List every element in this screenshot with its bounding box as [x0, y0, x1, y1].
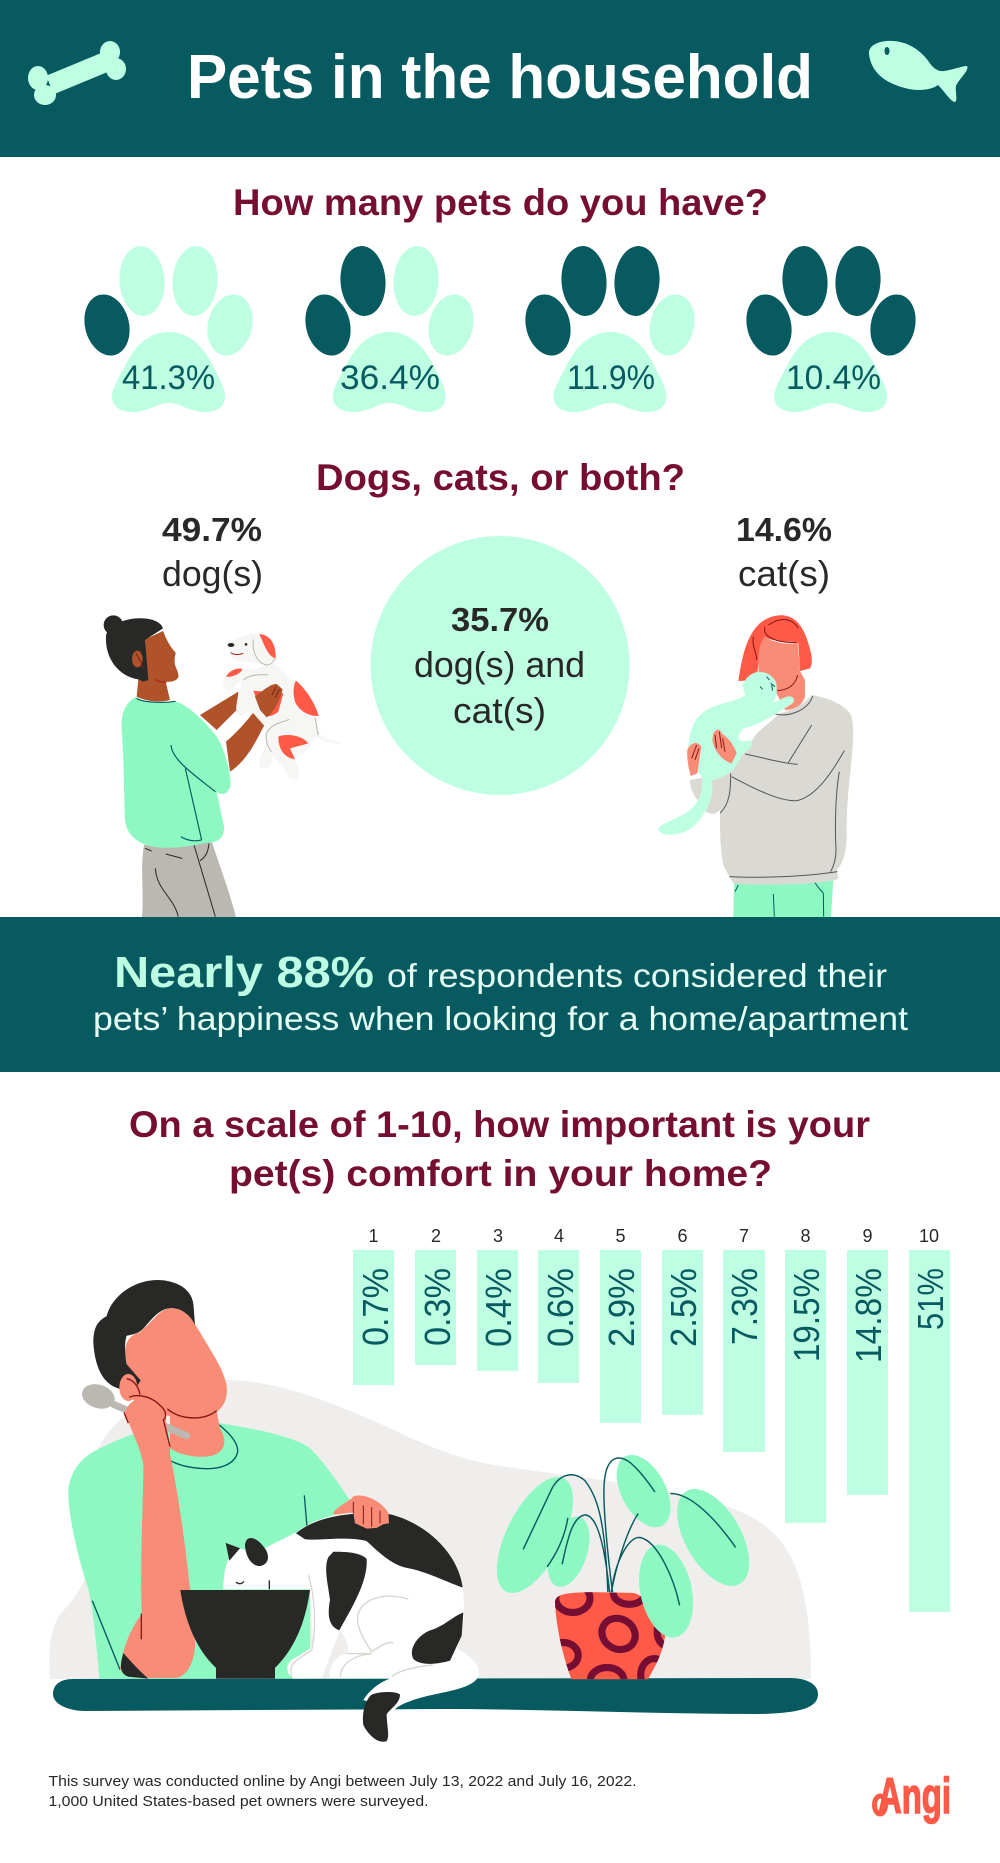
bar 5: 2.9%: 2.9% — [601, 1268, 642, 1347]
illustration: table — [53, 1678, 818, 1714]
bar 1: 0.7% — [353, 1226, 396, 1385]
bar 9: 14.8%: 9 — [862, 1226, 873, 1246]
bar 6: 2.5% — [662, 1226, 704, 1415]
bar 3: 0.4%: 3 — [493, 1226, 503, 1246]
icon: paw one pet 41.3% — [78, 245, 259, 412]
bar 1: 0.7%: 1 — [368, 1226, 379, 1246]
bar 10: 51%: 51% — [910, 1268, 951, 1330]
heading: dogs cats or both: Dogs, cats, or both? — [316, 457, 685, 498]
callout band: nearly 88%: pets’ happiness when looking for a home/apartment — [93, 1000, 908, 1037]
bar 10: 51% — [909, 1226, 951, 1612]
icon: paw two pets 36.4%: 36.4% — [340, 359, 440, 397]
bar 4: 0.6%: 4 — [554, 1226, 564, 1246]
callout band: nearly 88%: of respondents considered their — [387, 957, 887, 994]
stat: dogs 49.7% — [162, 511, 263, 594]
callout band: nearly 88% — [0, 917, 1000, 1072]
bar 2: 0.3%: 2 — [431, 1226, 441, 1246]
icon: bone — [28, 41, 126, 105]
bar 8: 19.5% — [785, 1226, 827, 1523]
stat: cats 14.6% — [736, 511, 832, 594]
footer: survey note: This survey was conducted online by Angi between July 13, 2022 and July 16, 2022. — [48, 1773, 636, 1790]
stat: cats 14.6%: 14.6% — [736, 511, 832, 548]
heading: importance of comfort: pet(s) comfort in your home? — [229, 1153, 772, 1194]
title: Pets in the household — [187, 43, 813, 112]
footer: survey note: 1,000 United States-based pet owners were surveyed. — [48, 1793, 428, 1810]
bar 3: 0.4%: 0.4% — [478, 1268, 519, 1347]
bar 4: 0.6%: 0.6% — [540, 1268, 581, 1347]
panel: header banner — [0, 0, 1000, 157]
icon: paw three pets 11.9% — [519, 245, 701, 412]
icon: paw two pets 36.4% — [299, 245, 480, 412]
icon: paw four or more pets 10.4% — [740, 245, 922, 412]
bar 7: 7.3% — [723, 1226, 765, 1452]
stat: both 35.7% in circle: 35.7% — [451, 601, 549, 638]
icon: fish — [869, 41, 967, 102]
stat: dogs 49.7%: dog(s) — [162, 553, 263, 594]
stat: both 35.7% in circle: dog(s) and — [414, 644, 585, 685]
illustration: man with cat and bowl — [68, 1280, 479, 1742]
bar 6: 2.5%: 6 — [677, 1226, 688, 1246]
bar 9: 14.8% — [847, 1226, 889, 1495]
stat: both 35.7% in circle: cat(s) — [453, 690, 546, 731]
icon: paw three pets 11.9%: 11.9% — [567, 359, 655, 397]
heading: importance of comfort: On a scale of 1-10, how important is your — [129, 1104, 870, 1145]
stat: both 35.7% in circle — [370, 536, 630, 795]
bar 4: 0.6% — [538, 1226, 581, 1383]
bar 6: 2.5%: 2.5% — [663, 1268, 704, 1347]
bar 10: 51%: 10 — [919, 1226, 939, 1246]
illustration: person holding dog — [104, 615, 343, 917]
stat: dogs 49.7%: 49.7% — [162, 511, 262, 548]
logo: Angi: Angi — [878, 1768, 951, 1824]
heading: how many pets: How many pets do you have? — [233, 182, 768, 223]
bar 5: 2.9%: 5 — [615, 1226, 626, 1246]
icon: paw four or more pets 10.4%: 10.4% — [786, 359, 881, 397]
bar chart: comfort importance 1-10 — [353, 1226, 951, 1612]
bar 7: 7.3%: 7 — [739, 1226, 749, 1246]
bar 3: 0.4% — [477, 1226, 519, 1371]
callout band: nearly 88%: Nearly 88% — [114, 948, 374, 997]
bar 5: 2.9% — [600, 1226, 642, 1423]
illustration: person holding cat — [658, 615, 853, 917]
bar 7: 7.3%: 7.3% — [724, 1268, 765, 1345]
illustration: plant in pot — [496, 1454, 750, 1680]
stat: cats 14.6%: cat(s) — [738, 553, 830, 594]
bar 1: 0.7%: 0.7% — [355, 1268, 396, 1346]
bar 8: 19.5%: 19.5% — [786, 1268, 827, 1362]
panel: paw stats — [78, 245, 922, 412]
illustration background: grey blob — [49, 1380, 811, 1679]
icon: paw one pet 41.3%: 41.3% — [122, 359, 215, 397]
bar 2: 0.3% — [415, 1226, 458, 1365]
bar 9: 14.8%: 14.8% — [848, 1268, 889, 1363]
bar 8: 19.5%: 8 — [800, 1226, 811, 1246]
bar 2: 0.3%: 0.3% — [417, 1268, 458, 1346]
heading: importance of comfort — [129, 1104, 870, 1194]
logo: Angi — [874, 1768, 951, 1824]
footer: survey note — [48, 1773, 636, 1810]
